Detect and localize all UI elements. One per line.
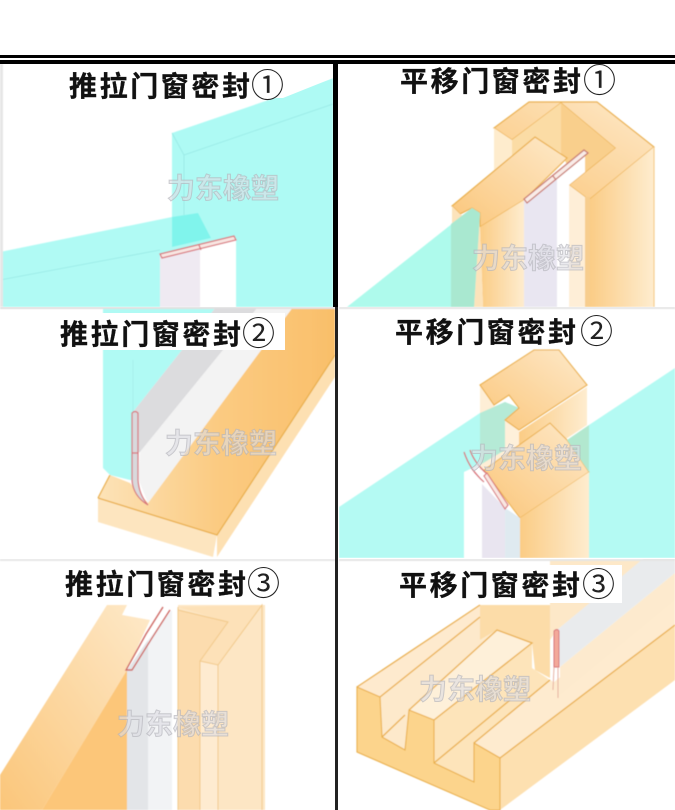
panel: translation door seal 1 xyxy=(347,102,654,307)
title: sliding 2: 推拉门窗密封 xyxy=(60,318,244,350)
illustration: glass and seal xyxy=(0,64,333,307)
illustration: glass, sill and seal xyxy=(0,307,335,557)
illustration: frame, glass and seal xyxy=(0,559,335,810)
illustration: frame, glass and seal xyxy=(339,307,675,558)
panel: translation door seal 3 xyxy=(339,558,675,810)
title: sliding 1: ① xyxy=(251,67,284,104)
panel: sliding door seal 1 xyxy=(0,64,333,307)
title: sliding 2: ② xyxy=(242,315,275,352)
watermark: 力东橡塑 xyxy=(165,428,277,459)
title: translation 2: 平移门窗密封 xyxy=(395,317,579,348)
watermark: 力东橡塑 xyxy=(167,173,279,204)
illustration: track profile, glass and seal xyxy=(339,558,675,810)
top double rule xyxy=(0,55,675,64)
title: translation 3: ③ xyxy=(582,566,615,603)
panel: sliding door seal 3 xyxy=(0,559,335,810)
title: sliding 1 xyxy=(60,65,333,104)
title: sliding 3: ③ xyxy=(247,565,280,602)
panel: translation door seal 2 xyxy=(339,307,675,558)
title: translation 1: 平移门窗密封 xyxy=(400,66,584,97)
title: sliding 3: 推拉门窗密封 xyxy=(65,568,249,600)
title: translation 2: ② xyxy=(580,313,613,350)
watermark: 力东橡塑 xyxy=(419,674,531,705)
watermark: 力东橡塑 xyxy=(470,443,582,474)
title: sliding 2 xyxy=(0,313,285,352)
watermark: 力东橡塑 xyxy=(117,709,229,740)
watermark: 力东橡塑 xyxy=(472,243,584,274)
title: sliding 1: 推拉门窗密封 xyxy=(69,70,253,102)
title: translation 3: 平移门窗密封 xyxy=(399,570,583,601)
panel: sliding door seal 2 xyxy=(0,307,335,557)
panel divider xyxy=(333,64,338,810)
title: translation 3 xyxy=(339,565,622,603)
illustration: frame, glass and seal xyxy=(347,102,654,307)
title: translation 1: ① xyxy=(583,62,616,99)
